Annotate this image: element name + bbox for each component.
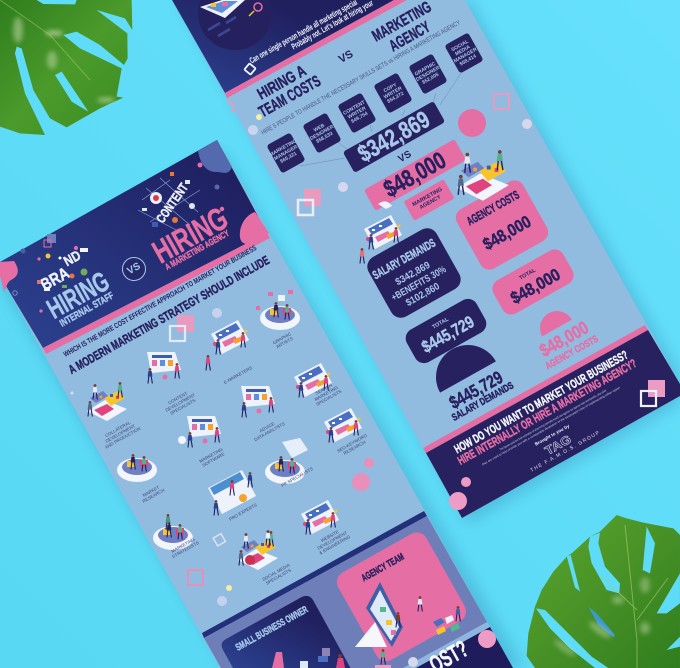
panel: salary demands: +BENEFITS 30% — [390, 264, 448, 304]
illustration: social media specialists: SPECIALISTS — [265, 567, 292, 585]
cost box: marketing manager: MARKETING — [269, 138, 298, 158]
illustration: e-marketers: E-MARKETERS — [223, 365, 253, 385]
icon: agency team phone — [355, 582, 460, 664]
illustration: collateral development: AND PRODUCTION — [104, 425, 141, 449]
cost box: social media manager: $58,414 — [459, 53, 478, 67]
panel: hiring internal staff vs agency poster (left) — [0, 140, 524, 668]
illustration: pr specialists: PR SPECIALISTS — [280, 466, 314, 488]
cost box: content writer: CONTENT — [342, 100, 366, 117]
icon: brand illustration: ND — [61, 247, 83, 269]
illustration: search marketing specialists: MARKETING — [313, 384, 339, 402]
heading: footer question — [452, 348, 639, 468]
connector lines — [300, 70, 463, 166]
illustration: data analysts: ADVICE — [258, 421, 275, 433]
illustration: website development — [301, 500, 351, 555]
illustration: market research: RESEARCH — [141, 487, 165, 503]
cost box: web designer: WEB — [313, 123, 326, 134]
cost box: copy writer: WRITER — [383, 85, 403, 100]
illustration: content development specialists — [147, 352, 198, 417]
decorative squares and dots — [70, 308, 374, 606]
panel: small business owner card — [222, 596, 350, 668]
illustration: website development: WEBSITE — [320, 529, 339, 543]
cost box: graphic designer — [408, 53, 448, 95]
illustration: content development specialists: DEVELOPMENT — [164, 392, 196, 412]
panel: cost footer — [375, 627, 513, 668]
cost box: copy writer — [373, 72, 413, 114]
panel: agency total: $48,000 — [507, 265, 564, 308]
brand: the famos group logo: TAG — [542, 432, 574, 458]
box: marketing agency: MARKETING — [412, 187, 444, 208]
icon: content illustration — [138, 172, 200, 232]
icon: vs badge: VS — [125, 261, 143, 277]
text: fine print: they are used to help provide you with a comparable illustration of the associated costs of implementing either option — [481, 385, 621, 466]
illustration: collateral development: DEVELOPMENT — [104, 423, 136, 443]
panel: salary demands: $102,860 — [404, 281, 442, 309]
cost box: marketing manager: $65,321 — [279, 151, 298, 165]
panel: small business owner card: SMALL BUSINESS OWNER — [234, 604, 310, 654]
illustration: marketing software — [178, 416, 226, 468]
icon: monstera leaf top left — [0, 0, 132, 135]
cost box: content writer: $49,754 — [350, 111, 369, 125]
text: intro question — [248, 0, 375, 65]
illustration: marketing software: MARKETING — [198, 446, 224, 463]
icon: brand illustration: BRA — [37, 263, 73, 295]
illustration: collateral development — [87, 382, 141, 449]
cost box: graphic designer: GRAPHIC — [414, 61, 437, 77]
illustration: pr specialists — [265, 438, 314, 488]
illustration: search marketing specialists — [294, 363, 342, 406]
illustration: marketing strategists: STRATEGISTS — [171, 540, 200, 559]
heading: hiring internal staff: HIRING — [42, 265, 114, 325]
illustration: marketing strategists — [153, 514, 200, 559]
panel: hiring costs poster (right) — [172, 0, 680, 524]
illustration: graphic artists — [256, 290, 300, 349]
text: agency costs values: $48,000 — [480, 212, 534, 254]
heading: strategy question: WHICH IS THE MORE COST EFFECTIVE APPROACH TO MARKET YOUR BUSINESS — [62, 243, 258, 359]
heading: strategy question — [62, 243, 272, 377]
illustration: marketing software: SOFTWARE — [201, 451, 225, 467]
total bar: team: $342,869 — [353, 106, 435, 168]
panel: comparison section — [202, 511, 513, 668]
illustration: marketing strategists: MARKETING — [170, 536, 196, 553]
illustration: collateral development: COLLATERAL — [104, 419, 132, 438]
panel: team total: $445,729 — [418, 312, 477, 357]
panel: team total — [402, 295, 490, 367]
illustration: pro experts — [208, 470, 258, 522]
icon: top device illustration — [200, 0, 262, 36]
cost box: social media manager: MEDIA — [454, 44, 472, 57]
illustration: salary team — [360, 201, 402, 264]
panel: salary demands: SALARY DEMANDS — [370, 236, 438, 282]
panel: agency costs — [452, 177, 552, 273]
vs label: VS — [396, 149, 414, 165]
heading: hiring a marketing agency: HIRING — [146, 200, 234, 270]
illustration: pro experts: PRO EXPERTS — [228, 502, 258, 522]
text: agency costs total — [536, 317, 601, 372]
heading: hiring internal staff: INTERNAL STAFF — [58, 291, 116, 329]
headings: team costs vs agency: TEAM COSTS — [256, 73, 324, 121]
illustration: agency team at work — [457, 150, 509, 201]
headings: team costs vs agency: HIRING A — [255, 62, 310, 103]
text: agency costs values: AGENCY COSTS — [464, 188, 522, 228]
heading: hiring a marketing agency: A MARKETING AGENCY — [163, 228, 231, 272]
illustration: market research: MARKET — [142, 484, 160, 497]
panel: agency team card: AGENCY TEAM — [360, 552, 406, 584]
text: fine print: The figures used are from estimates of what hiring internally would cost against our agency rates and benefits, plus other — [499, 388, 607, 452]
icon: monstera leaf bottom right — [527, 515, 680, 668]
text: salary demands total: SALARY DEMANDS — [450, 380, 516, 424]
text: salary demands total: $445,729 — [446, 367, 506, 413]
panel: salary demands — [363, 224, 465, 322]
chart: salary semicircle — [424, 333, 496, 393]
heading: hiring a marketing agency — [146, 200, 234, 272]
total bar: agency: $48,000 — [379, 147, 451, 203]
headings: team costs vs agency: AGENCY — [387, 19, 434, 55]
illustration: social media specialists: SOCIAL MEDIA — [261, 562, 291, 582]
decorative shapes — [226, 94, 532, 215]
text: agency costs values — [464, 188, 534, 254]
cost box: social media manager: SOCIAL — [450, 39, 470, 53]
cost box: web designer — [302, 112, 342, 154]
cost box: content writer: WRITER — [347, 105, 367, 120]
illustration: e-marketers — [206, 320, 253, 385]
panel: agency team card — [333, 528, 470, 665]
text: agency costs total: $48,000 — [536, 317, 592, 361]
panel: agency total — [489, 246, 577, 318]
text: agency costs total: AGENCY COSTS — [544, 334, 601, 372]
panel: salary demands: $342,869 — [394, 260, 433, 288]
illustration: content development specialists: SPECIALISTS — [169, 397, 196, 415]
icon: brand illustration — [37, 246, 88, 295]
cost box: copy writer: $54,372 — [386, 91, 405, 105]
illustration: website development: DEVELOPMENT — [316, 530, 348, 550]
cost box: web designer: $58,533 — [315, 131, 334, 145]
box: marketing agency — [404, 179, 454, 221]
panel: agency total: TOTAL — [518, 267, 538, 282]
illustration: graphic artists: GRAPHIC — [272, 331, 292, 345]
cost box: social media manager: MANAGER — [453, 46, 479, 65]
cost box: graphic designer: $52,005 — [421, 72, 440, 86]
panel: right footer — [426, 330, 680, 518]
illustration: seo keyword research — [324, 408, 370, 458]
brand: the famos group logo: THE F.A.M.O.S. GROUP — [530, 430, 601, 474]
cost box: marketing manager: MANAGER — [273, 144, 299, 162]
illustration: market research — [117, 454, 165, 503]
chart: agency semicircle — [534, 305, 572, 336]
illustration: content development specialists: CONTENT — [167, 390, 188, 405]
panel: right header — [172, 0, 407, 98]
heading: hiring internal staff — [42, 265, 116, 329]
cost box: graphic designer: DESIGNER — [415, 65, 441, 83]
heading: strategy question: A MODERN MARKETING STRATEGY SHOULD INCLUDE — [66, 253, 272, 377]
illustration: seo keyword research: RESEARCH — [342, 439, 366, 455]
illustration: search marketing specialists: SPECIALISTS — [315, 388, 342, 406]
illustration: data analysts — [241, 386, 286, 442]
illustration: website development: & ENGINEERING — [318, 533, 351, 555]
cost box: web designer: DESIGNER — [309, 124, 335, 142]
brand: the famos group logo: Brought to you by — [534, 423, 571, 447]
illustration: search marketing specialists: SEARCH — [314, 382, 333, 395]
box: marketing agency: AGENCY — [419, 194, 442, 211]
panel: left header — [0, 140, 270, 354]
illustration: graphic artists: ARTISTS — [275, 335, 294, 349]
illustration: data analysts: DATA ANALYSTS — [253, 421, 286, 442]
illustration: social media specialists — [238, 530, 293, 586]
cost box: social media manager — [444, 32, 484, 74]
cost box: copy writer: COPY — [383, 82, 399, 94]
icon: content illustration: CONTENT — [153, 180, 191, 226]
headings: team costs vs agency: VS — [337, 48, 355, 66]
panel: team total: TOTAL — [431, 316, 451, 331]
cost box: content writer — [337, 92, 377, 134]
icon: vs badge — [122, 258, 146, 280]
cost box: marketing manager — [265, 132, 307, 174]
illustration: seo keyword research: SEO-KEYWORD — [336, 432, 368, 453]
